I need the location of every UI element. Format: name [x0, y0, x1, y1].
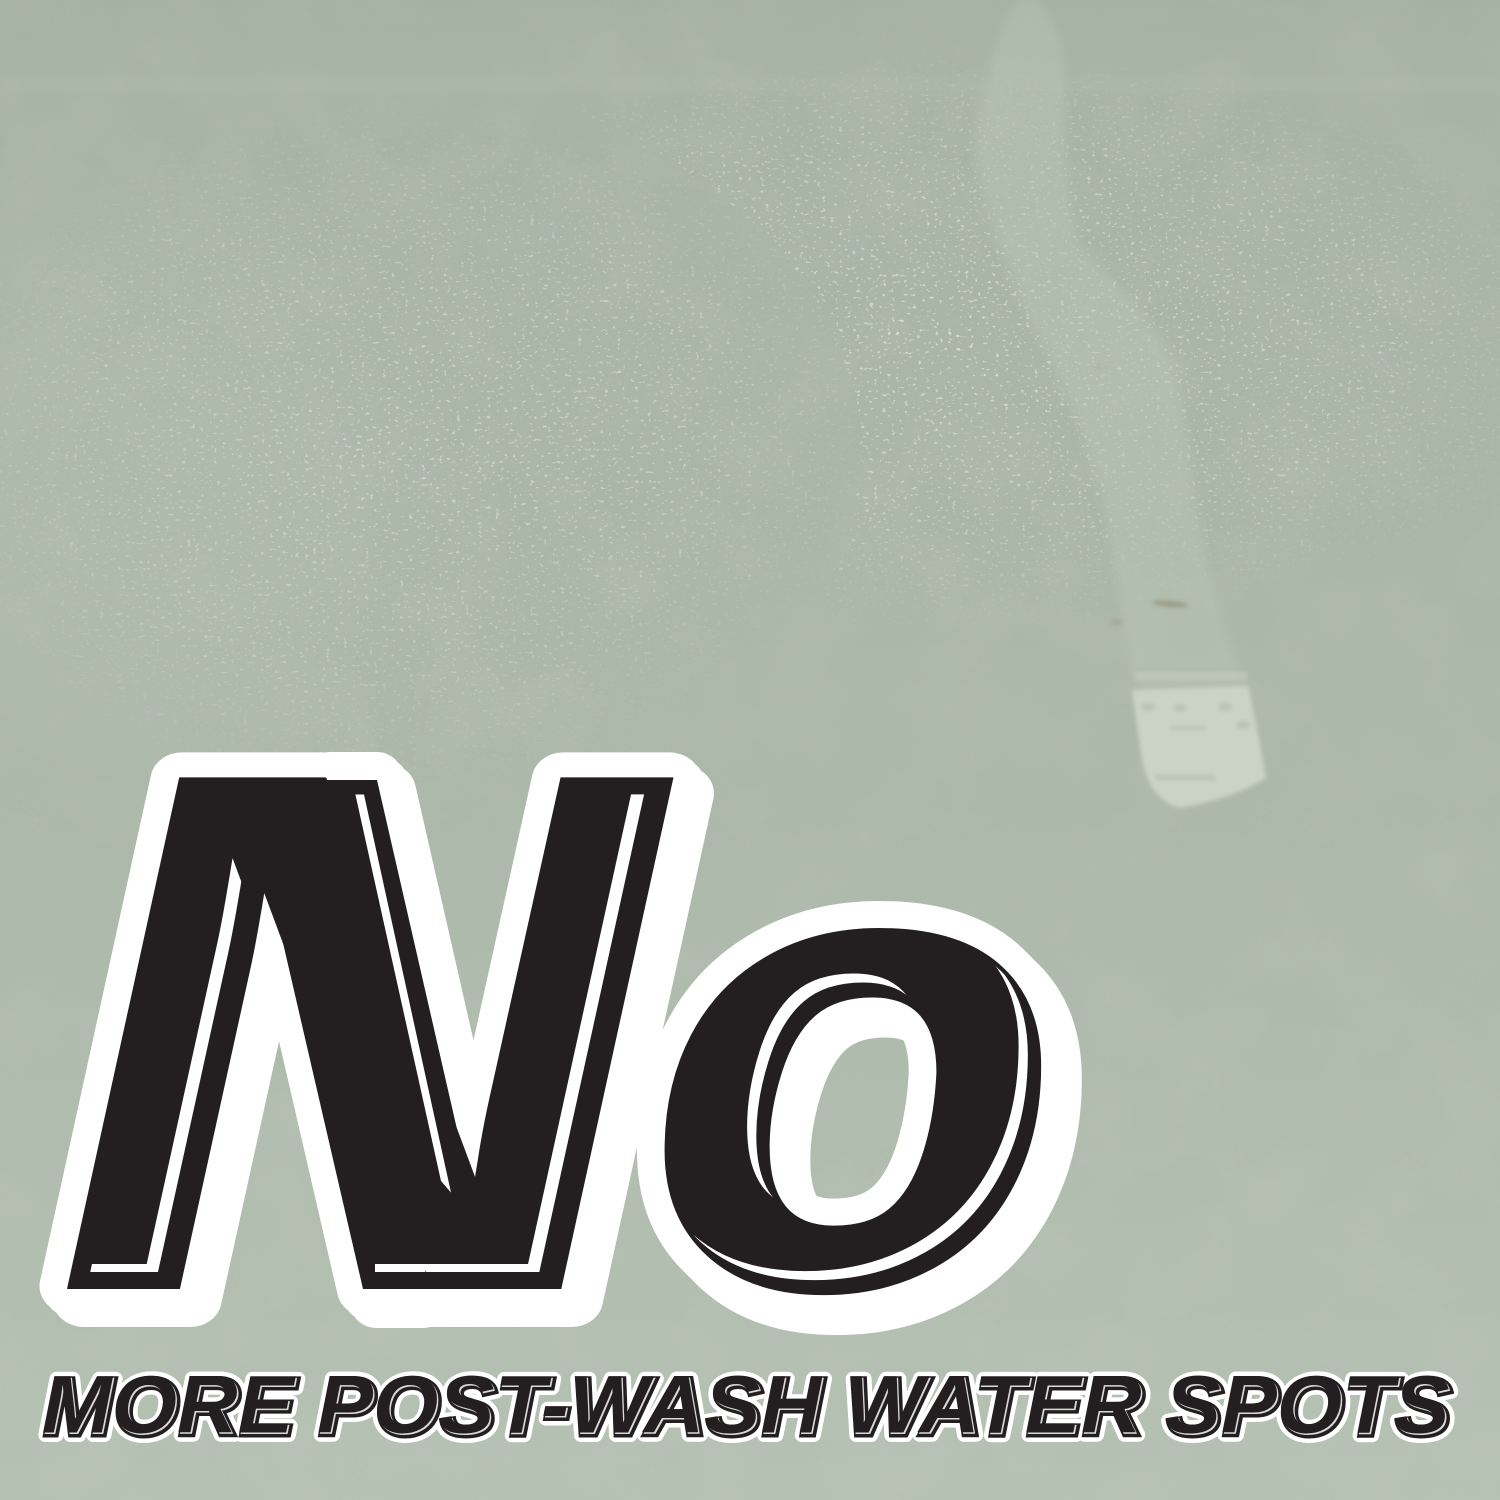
- letter o: o: [630, 671, 1040, 1404]
- wiper tip stripe: [1135, 672, 1247, 680]
- subheading inline highlight: MORE POST-WASH WATER SPOTS: [43, 1361, 1451, 1452]
- white sticker outline: [56, 622, 1072, 1456]
- letter N: N: [37, 608, 659, 1429]
- white sticker outline: N: [70, 635, 691, 1456]
- letter N: [67, 777, 674, 1289]
- white sticker outline: N: [61, 626, 683, 1447]
- subheading black fill: MORE POST-WASH WATER SPOTS: [44, 1362, 1452, 1453]
- white sticker outline: o: [661, 704, 1072, 1437]
- headline: No: [40, 752, 1082, 1336]
- N diagonal weight and shading: [268, 780, 470, 1289]
- rust smudge: [1097, 365, 1188, 625]
- letter N: N: [56, 622, 678, 1443]
- white sticker outline: o: [652, 696, 1063, 1428]
- letter o: o: [639, 680, 1050, 1413]
- white sticker outline: N: [56, 622, 678, 1443]
- subheading: more post-wash water spots: [42, 1360, 1452, 1453]
- letter o: [664, 928, 1042, 1296]
- wiper tip mark: [1132, 686, 1266, 808]
- letter N: N: [26, 600, 648, 1421]
- subheading face: MORE POST-WASH WATER SPOTS: [42, 1360, 1450, 1451]
- letter o: o: [648, 691, 1059, 1424]
- tip mark dark dots: [1141, 703, 1250, 780]
- letter N: N: [56, 622, 678, 1443]
- subheading white outline: MORE POST-WASH WATER SPOTS: [44, 1362, 1452, 1453]
- wiper streak: [975, 0, 1245, 690]
- white sticker outline: o: [648, 691, 1059, 1424]
